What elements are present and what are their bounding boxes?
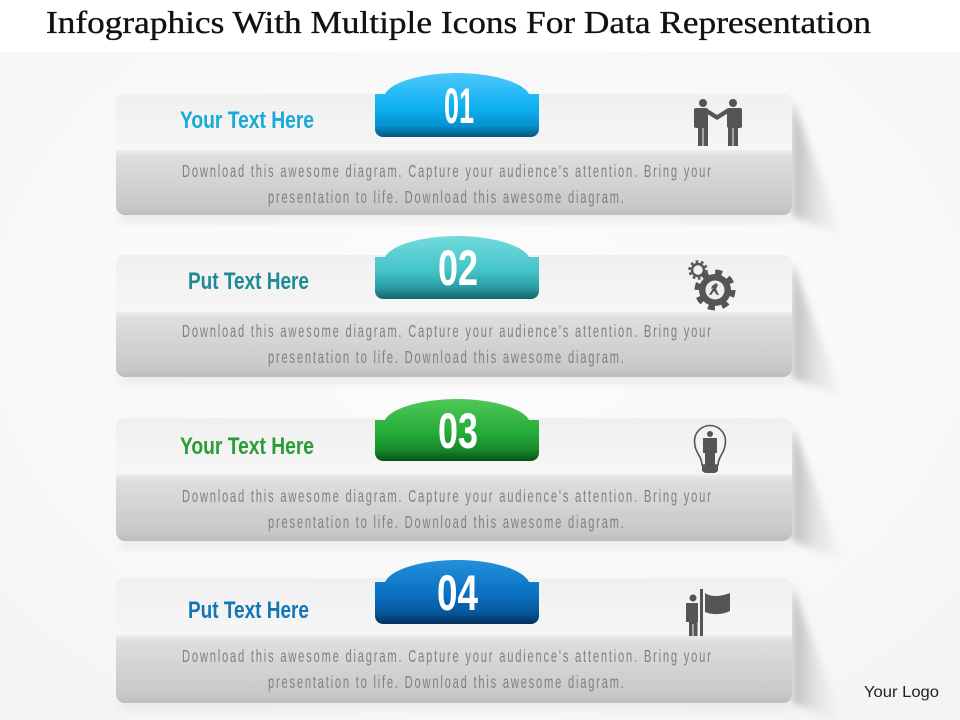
body text 4 bbox=[182, 646, 711, 693]
body text 4: presentation to life. Download this awesome diagram. bbox=[268, 672, 624, 693]
card glow 1 bbox=[120, 210, 788, 222]
heading 3: Your Text Here bbox=[180, 433, 314, 460]
badge 4 bbox=[375, 560, 539, 624]
body text 2: Download this awesome diagram. Capture your audience's attention. Bring your bbox=[182, 321, 711, 342]
badge 3 bbox=[375, 399, 539, 461]
card shadow 4 bbox=[792, 585, 842, 720]
body text 2: presentation to life. Download this awesome diagram. bbox=[268, 347, 624, 368]
card shadow 3 bbox=[792, 425, 842, 560]
card glow 3 bbox=[120, 536, 788, 548]
panel: row 2 bbox=[116, 236, 842, 397]
card shadow 1 bbox=[792, 100, 842, 235]
badge 1 bbox=[375, 73, 539, 137]
body text 4: Download this awesome diagram. Capture your audience's attention. Bring your bbox=[182, 646, 711, 667]
card band 4 bbox=[116, 635, 792, 703]
panel: row 4 bbox=[116, 560, 842, 720]
body text 1: presentation to life. Download this awesome diagram. bbox=[268, 187, 624, 208]
number 2: 02 bbox=[438, 240, 478, 296]
card top 2 bbox=[116, 255, 792, 313]
icon: person with flag bbox=[686, 589, 730, 636]
card band 3 bbox=[116, 474, 792, 541]
body text 1 bbox=[182, 161, 711, 208]
logo text: Your Logo bbox=[864, 684, 939, 701]
card top 4 bbox=[116, 578, 792, 636]
icon: handshake bbox=[694, 99, 742, 146]
title: Infographics With Multiple Icons For Data Representation bbox=[46, 4, 871, 40]
body text 1: Download this awesome diagram. Capture your audience's attention. Bring your bbox=[182, 161, 711, 182]
card glow 4 bbox=[120, 698, 788, 710]
heading 2: Put Text Here bbox=[188, 268, 309, 295]
panel: row 1 bbox=[116, 73, 842, 235]
number 3: 03 bbox=[438, 403, 478, 459]
card band 1 bbox=[116, 150, 792, 215]
card top 1 bbox=[116, 94, 792, 151]
heading 4: Put Text Here bbox=[188, 597, 309, 624]
icon: gears bbox=[690, 262, 733, 308]
icon: lightbulb bbox=[694, 426, 726, 473]
card shadow 2 bbox=[792, 262, 842, 397]
heading 1: Your Text Here bbox=[180, 107, 314, 134]
number 1: 01 bbox=[444, 78, 474, 134]
card glow 2 bbox=[120, 372, 788, 384]
body text 3: Download this awesome diagram. Capture your audience's attention. Bring your bbox=[182, 486, 711, 507]
badge 2 bbox=[375, 236, 539, 299]
panel: row 3 bbox=[116, 399, 842, 560]
card top 3 bbox=[116, 418, 792, 475]
body text 3: presentation to life. Download this awesome diagram. bbox=[268, 512, 624, 533]
title bar bbox=[0, 0, 960, 52]
number 4: 04 bbox=[437, 565, 478, 621]
card band 2 bbox=[116, 312, 792, 377]
body text 3 bbox=[182, 486, 711, 533]
body text 2 bbox=[182, 321, 711, 368]
